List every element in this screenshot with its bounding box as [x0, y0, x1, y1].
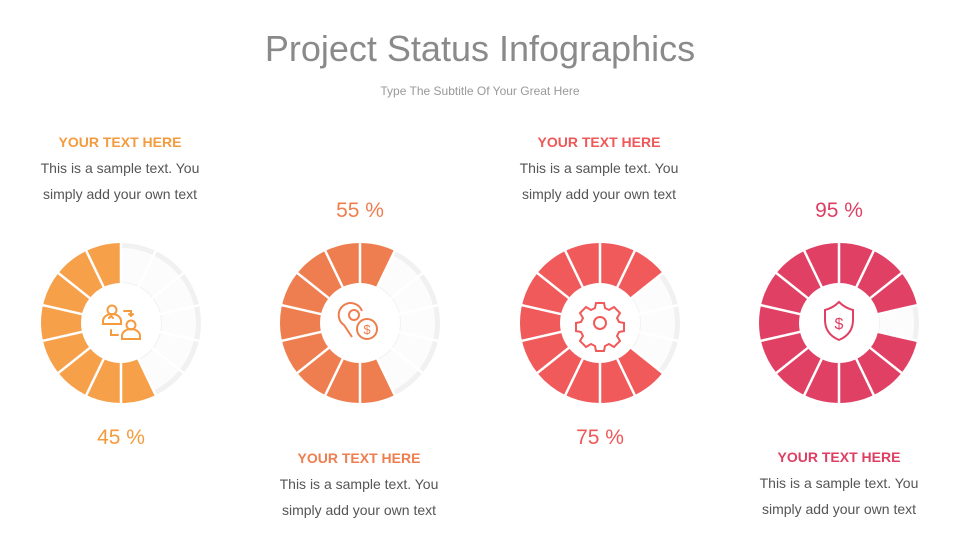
donut 4: [757, 239, 921, 407]
icon: location money: [339, 303, 377, 339]
text 2: This is a sample text. You: [280, 476, 438, 492]
icon: shield dollar: [825, 302, 853, 340]
heading 4: YOUR TEXT HERE: [778, 449, 900, 465]
donut 1: [39, 239, 203, 407]
text 1: This is a sample text. You: [41, 160, 199, 176]
icon: location money: $: [363, 322, 371, 337]
text 1: [40, 160, 199, 202]
title: Project Status Infographics: [265, 28, 695, 69]
text 3: This is a sample text. You: [520, 160, 678, 176]
text 2: [280, 476, 438, 518]
percent 2: 55 %: [336, 199, 384, 222]
icon: shield dollar: $: [835, 316, 844, 333]
heading 3: YOUR TEXT HERE: [538, 134, 660, 150]
subtitle: Type The Subtitle Of Your Great Here: [380, 84, 580, 98]
donut 3: [518, 239, 682, 407]
donut 2: [278, 239, 442, 407]
text 1: simply add your own text: [43, 186, 197, 202]
text 4: [760, 475, 918, 517]
text 3: simply add your own text: [522, 186, 676, 202]
heading 1: YOUR TEXT HERE: [59, 134, 181, 150]
percent 3: 75 %: [576, 426, 624, 449]
icon: people exchange: [103, 306, 140, 339]
text 2: simply add your own text: [282, 502, 436, 518]
percent 1: 45 %: [97, 426, 145, 449]
percent 4: 95 %: [815, 199, 863, 222]
text 4: This is a sample text. You: [760, 475, 918, 491]
text 4: simply add your own text: [762, 501, 916, 517]
heading 2: YOUR TEXT HERE: [298, 450, 420, 466]
icon: gear: [576, 303, 624, 351]
text 3: [520, 160, 678, 202]
